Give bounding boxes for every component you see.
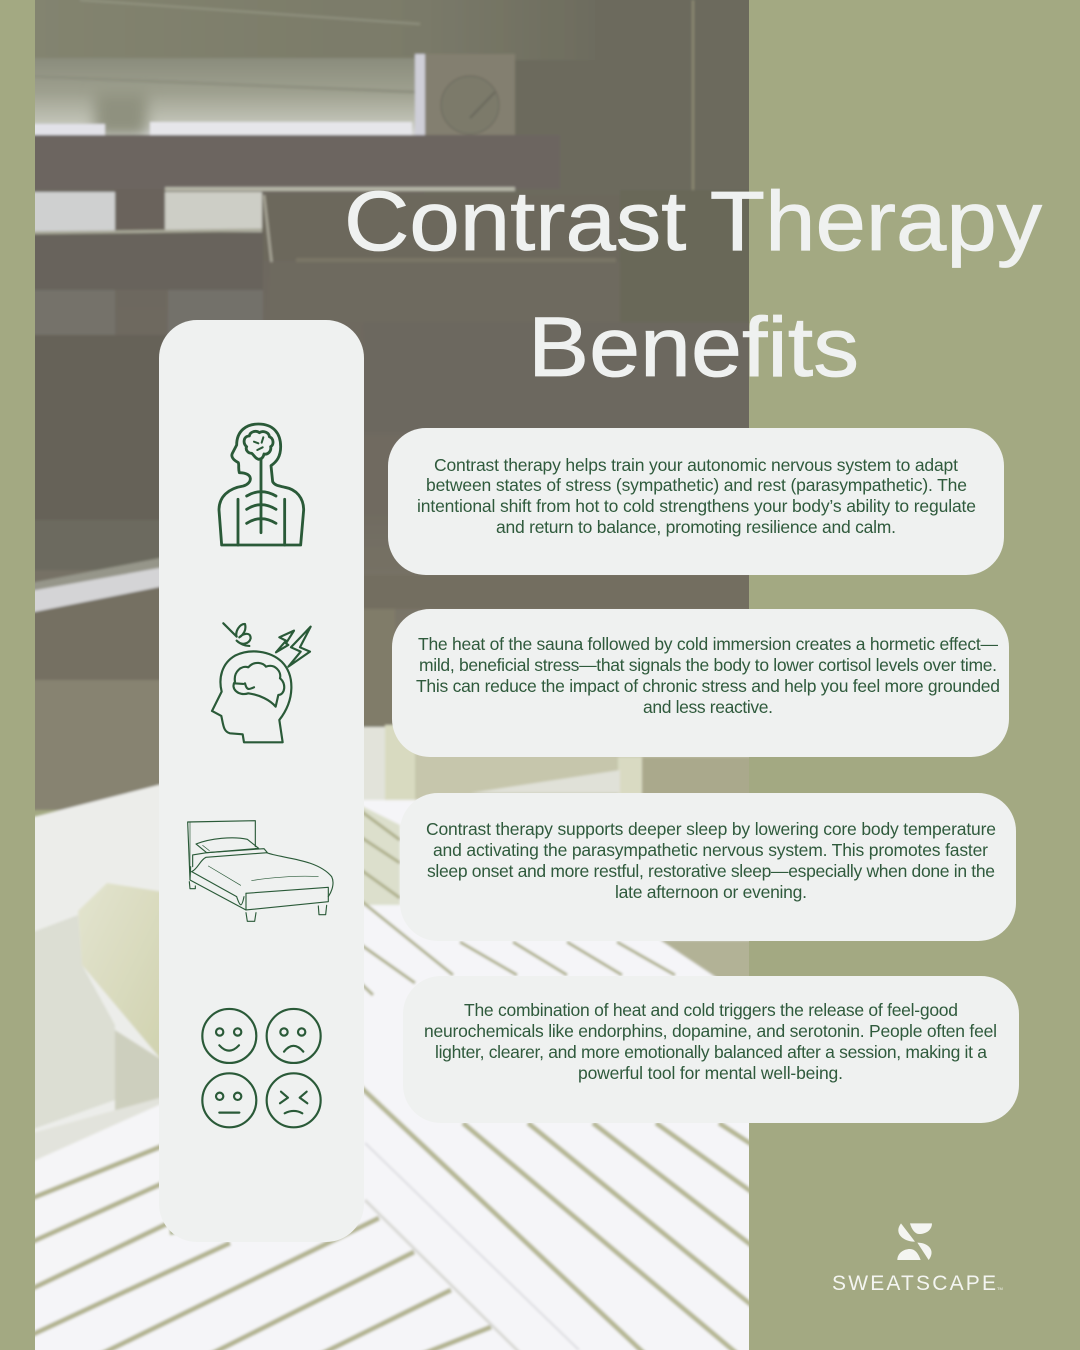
title <box>344 174 1042 394</box>
card: sleep text: Contrast therapy supports deeper sleep by lowering core body temperature <box>426 819 996 839</box>
icon: stressed head <box>212 623 311 742</box>
icon: logo mark <box>897 1223 932 1260</box>
card: mood text <box>403 976 1019 1123</box>
card: stress text: mild, beneficial stress—that signals the body to lower cortisol levels over time. <box>419 655 997 675</box>
slats lower left <box>168 1232 352 1350</box>
card: nervous system text <box>388 428 1004 575</box>
cream beam <box>35 916 116 1128</box>
card: nervous system text: intentional shift from hot to cold strengthens your body’s ability to regulate <box>417 496 976 516</box>
card: sleep text: late afternoon or evening. <box>615 882 807 902</box>
card: mood text: lighter, clearer, and more emotionally balanced after a session, making it a <box>435 1042 987 1062</box>
icon: four mood faces <box>202 1009 321 1127</box>
title: Benefits <box>528 300 859 394</box>
photo: sauna benches <box>25 0 760 1350</box>
slats lower right <box>350 1077 760 1350</box>
panel: icon column <box>159 320 364 1242</box>
card: stress text <box>392 609 1009 757</box>
card: nervous system text: Contrast therapy helps train your autonomic nervous system to adapt <box>434 455 958 475</box>
icon: bed <box>188 821 333 921</box>
card: nervous system text: between states of stress (sympathetic) and rest (parasympathetic). The <box>426 475 967 495</box>
card: mood text: powerful tool for mental well-being. <box>578 1063 843 1083</box>
logo: Sweatscape <box>832 1223 1003 1295</box>
lower bench mass <box>25 782 170 1350</box>
card: sleep text: and activating the parasympathetic nervous system. This promotes faster <box>433 840 988 860</box>
card: mood text: neurochemicals like endorphins, dopamine, and serotonin. People often feel <box>424 1021 997 1041</box>
logo: Sweatscape: TM <box>997 1286 1003 1291</box>
title: Contrast Therapy <box>344 174 1042 268</box>
icon: nervous system figure <box>219 424 304 545</box>
card: mood text: The combination of heat and cold triggers the release of feel-good <box>464 1000 958 1020</box>
card: stress text: The heat of the sauna followed by cold immersion creates a hormetic effect— <box>418 634 998 654</box>
logo: Sweatscape: SWEATSCAPE <box>832 1272 996 1295</box>
card: sleep text <box>400 793 1016 941</box>
card: sleep text: sleep onset and more restful, restorative sleep—especially when done in the <box>427 861 995 881</box>
card: stress text: and less reactive. <box>643 697 773 717</box>
card: stress text: This can reduce the impact of chronic stress and help you feel more grounded <box>416 676 1000 696</box>
card: nervous system text: and return to balance, promoting resilience and calm. <box>496 517 896 537</box>
